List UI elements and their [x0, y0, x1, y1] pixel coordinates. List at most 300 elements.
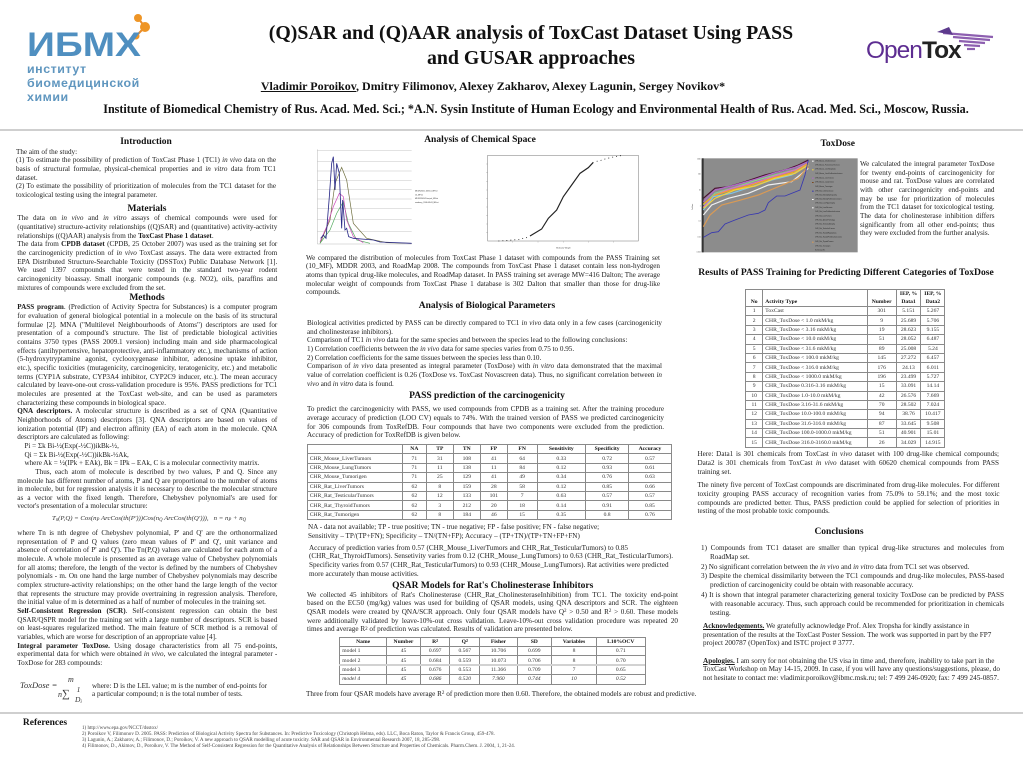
text: Chebyshev explanation: Integral parameter ToxDose. Using dosage characteristics from all 75 end-points,	[17, 642, 277, 650]
table: PASS training results: CHR_ToxDose 316.0-3160.0 mkM/kg	[765, 440, 852, 446]
table: carcinogenicity prediction accuracy: 64	[519, 456, 525, 462]
text: Chebyshev explanation: on least-squares regularized method. The main feature of SCR method is a removal of	[17, 624, 277, 632]
text: accuracy notes: more accurately than mouse activities.	[309, 570, 419, 578]
text: Chebyshev explanation: molecule. A whole molecule is presented as an average value of Chebyshev polynomials	[17, 555, 277, 563]
table: carcinogenicity prediction accuracy: CHR_Mouse_LungTumors	[310, 465, 371, 471]
table: PASS training results: CHR_ToxDose 31.6-316.0 mkM/kg	[765, 421, 846, 427]
title: (Q)SAR and (Q)AAR analysis of ToxCast Dataset Using PASS	[269, 22, 793, 44]
text: chemical space description: compounds.	[306, 288, 341, 296]
text: methods	[17, 303, 278, 510]
table: PASS training results: CHR_ToxDose 0.316-3.16 mkM/kg	[765, 383, 846, 389]
table: PASS training results: 26	[879, 440, 884, 446]
table: carcinogenicity prediction accuracy: CHR_Rat_LiverTumors	[310, 484, 364, 490]
table: carcinogenicity prediction accuracy: 49	[519, 474, 525, 480]
title: and GUSAR approaches	[427, 46, 635, 68]
chart: molecular distribution line chart: 10_MF.txt	[415, 193, 423, 196]
text: acknowledgements: presentation of the results at the ToxCast Poster Session. The work was supported in part by the FP7	[703, 631, 991, 639]
chart: ToxDose curves: CHR_Mouse_LiverProliferativeLesions	[815, 172, 843, 175]
table: carcinogenicity prediction accuracy: Accuracy	[639, 446, 661, 452]
text: Chebyshev explanation: experimental data for which were obtained in vivo, we calculated the integral parameter -	[17, 650, 277, 658]
table: PASS training results: 11	[751, 402, 757, 408]
text: Chebyshev explanation: for all atoms; therefore, the length of the vector is defined by the numbers of Chebyshev	[17, 564, 277, 572]
table: carcinogenicity prediction accuracy: CHR_Mouse_Tumorigen	[310, 474, 367, 480]
chart: ToxDose curves: CHR_Rat_TesticularTumors	[815, 227, 835, 230]
table: PASS training results: IEP, %	[924, 291, 941, 297]
text: apologies	[703, 657, 1000, 682]
text: conclusions list	[701, 544, 1004, 617]
text: methods: Qi = Σk Bi-½(Exp(-½C))ikBk-½Ak,	[24, 451, 129, 459]
table: PASS training results: Activity Type	[765, 299, 797, 305]
table: PASS training results: 19	[879, 327, 884, 333]
table: PASS training results: 301	[877, 308, 886, 314]
table: PASS training results: 87	[879, 421, 884, 427]
text: references: 3) Lagunin, A.; Zakharov, A.; Filimonov, D.; Poroikov, V. A new approach to QSAR modelling of acute toxicity. SAR and QSAR in Environmental Research 2007, 18, 285-298.	[82, 737, 440, 743]
table: PASS training results: 9.508	[927, 421, 939, 427]
table: carcinogenicity prediction accuracy: 101	[490, 493, 498, 499]
formula: Chebyshev: Tn(P,Q) = Cos(nP ArcCos(th(P')))Cos(nQ ArcCos(th(Q'))), n = nP + nQ	[52, 515, 246, 523]
chart: ToxDose curves: 0.01	[698, 236, 701, 238]
text: introduction: The aim of the study:	[16, 148, 77, 156]
table: PASS training results: Number	[872, 299, 892, 305]
table: QSAR model validation: model 4	[342, 676, 360, 682]
text: conclusions list: 1) Compounds from TC1 dataset are smaller than typical drug-like structures and molecules from	[701, 544, 1004, 552]
table: carcinogenicity prediction accuracy: 46	[491, 512, 497, 518]
chart: molecular distribution line chart	[317, 149, 439, 244]
icon: orange molecule dots	[134, 14, 150, 40]
table: carcinogenicity prediction accuracy: 108	[463, 456, 471, 462]
table: QSAR model validation: 0.52	[616, 676, 626, 682]
table: PASS training results: 5.267	[927, 308, 939, 314]
text: methods: PASS program. (Prediction of Activity Spectra for Substances) is a computer program	[17, 303, 277, 311]
text: ToxDose description: mouse and rat. ToxDose values are correlated	[860, 177, 994, 185]
chart: ToxDose curves: Summary LEL	[815, 250, 825, 252]
table: PASS training results: Data2	[926, 299, 940, 305]
table: carcinogenicity prediction accuracy: 0.8	[604, 512, 611, 518]
chart: ToxDose curves: CHR_Rat_LiverTumors	[815, 214, 832, 217]
text: chemical space description: atoms than typical drug-like molecules, and RoadMap dataset. In PASS training set average MW=416 Dalton; The average	[306, 271, 660, 279]
table: carcinogenicity prediction accuracy: CHR_Mouse_LiverTumors	[310, 456, 371, 462]
text: biological parameters: Biological activities predicted by PASS can be directly compared to TC1 in vivo data only in a few cases (carcinogenicity	[307, 319, 662, 327]
text: PASS prediction: for 306 compounds from ToxRefDB. Four compounds that have two components were excluded from the prediction.	[307, 423, 664, 431]
heading: ToxDose: ToxDose	[820, 139, 855, 149]
table: carcinogenicity prediction accuracy: 0.14	[556, 503, 566, 509]
chart: ToxDose curves: CHR_Rat_Cholinesterase	[815, 189, 833, 192]
heading: PASS prediction of the carcinogenicity: PASS prediction of the carcinogenicity	[409, 391, 565, 401]
table: carcinogenicity prediction accuracy: NA	[410, 446, 418, 452]
chart: ToxDose curves: CHR_Mouse_Tumorigen	[815, 186, 833, 188]
text: references: 1) http://www.epa.gov/NCCT/dsstox/	[82, 725, 158, 731]
table: carcinogenicity prediction accuracy: 0.57	[645, 456, 655, 462]
table: QSAR model validation: 45	[401, 667, 406, 673]
text: QSAR models: QSAR models were created by QNA/SCR approach. Only four QSAR models have Q2 > 0.50 and R2 > 0.60. These models	[307, 608, 678, 616]
table: carcinogenicity prediction accuracy: 62	[412, 512, 417, 518]
table: carcinogenicity prediction accuracy: 0.34	[556, 474, 566, 480]
text: QSAR models	[307, 591, 678, 633]
table: carcinogenicity prediction accuracy: 18	[519, 503, 525, 509]
text: QSAR models: were additionally validated by leave-10%-out cross validation. Leave-10%-out cross validation procedure was repeated 20	[307, 617, 678, 625]
chart: ToxDose curves: CHR_Rat_ThyroidProliferativeLesions	[815, 236, 842, 239]
bottom divider	[0, 712, 1023, 714]
table: carcinogenicity prediction accuracy: FP	[490, 446, 497, 452]
authors: Vladimir Poroikov, Dmitry Filimonov, Alexey Zakharov, Alexey Lagunin, Sergey Novikov*	[261, 79, 725, 93]
table: QSAR model validation: 0.709	[528, 667, 541, 673]
text: introduction: basis of structural formulae, physical-chemical properties and in vitro data from TC1	[16, 165, 276, 173]
table: PASS training results: ToxCast	[765, 308, 784, 314]
text: PASS prediction: average accuracy of prediction (LOO CV) equals to 74%. With the trained version of PASS we predicted carcinogenicity	[307, 414, 664, 422]
table: carcinogenicity prediction accuracy: 129	[463, 474, 471, 480]
table: PASS training results: 38.76	[902, 411, 915, 417]
text: methods: ionization potential (IP) and electron affinity (EA) of each atom in the molecule. QNA	[17, 425, 277, 433]
table: carcinogenicity prediction accuracy	[307, 444, 672, 520]
table: PASS training results: 26.576	[901, 393, 916, 399]
text: discrimination summary: testing of the most probable toxic compounds.	[698, 507, 830, 515]
text: biological parameters	[307, 319, 662, 388]
text: methods: descriptors are calculated as following:	[17, 433, 129, 441]
table: carcinogenicity prediction accuracy: 12	[437, 493, 443, 499]
text: Chebyshev explanation: polynomials - m. On one hand the large number of Chebyshev polynomials may describe	[17, 572, 277, 580]
chart: ToxDose curves: CHR_Rat_KidneyNephropathy	[815, 193, 837, 196]
text: apologies: ToxCast Workshop on May 14-15, 2009. In case, if you will have any questions/suggestions, please, do	[703, 665, 1000, 673]
text: ToxDose description: may be use for prioritization of molecules	[860, 195, 994, 203]
chart: ToxDose curves: 0.001	[697, 252, 701, 254]
chart: ToxDose curves: CHR_Mouse_LiverTumors	[815, 177, 834, 179]
heading: Conclusions: Conclusions	[814, 527, 864, 537]
table: PASS training results: 89	[879, 346, 884, 352]
table: carcinogenicity prediction accuracy: 71	[412, 465, 417, 471]
table: PASS training results: 51	[879, 430, 884, 436]
text: materials: mixtures of compounds were excluded from the set.	[17, 284, 166, 292]
fraction one over D: 1	[77, 685, 80, 694]
chart: ToxDose curves: CHR_Rat_SpleenPathology	[815, 218, 835, 221]
text: methods: terms (CYP1A substrate, CYP3A4 inhibitor, CYP2C9 inducer, etc.). The mean accuracy	[17, 373, 277, 381]
table: PASS training results: 1	[753, 308, 756, 314]
table: carcinogenicity prediction accuracy: 212	[463, 503, 471, 509]
text: methods: vector's presentation of a molecular structure:	[17, 502, 148, 510]
table: PASS training results: 51	[879, 336, 884, 342]
text: acknowledgements	[703, 622, 992, 647]
chart: molecular distribution line chart: roadmap_2008-09-09_MF.txt	[415, 201, 439, 204]
logo caption: биомедицинской	[27, 76, 140, 90]
text: biological parameters: vivo and in vitro data is found.	[307, 380, 394, 388]
table: PASS training results: 145	[877, 355, 886, 361]
table: carcinogenicity prediction accuracy: 3	[438, 503, 441, 509]
chart: ToxDose curves: CHR_Rat_ThyroidHyperplasia	[815, 231, 837, 234]
logo wordmark: ИБМХ	[27, 26, 141, 64]
table: carcinogenicity prediction accuracy: TP	[436, 446, 443, 452]
text: ToxDose description: for twenty end-points of carcinogenicity for	[860, 169, 994, 177]
heading: Results of PASS Training: Results of PASS Training for Predicting Different Categories of ToxDose	[698, 267, 994, 278]
table: PASS training results: 24.13	[902, 365, 915, 371]
text: methods: effects (antihypertensive, hepatoprotective, anti-inflammatory etc.), mechanisms of action	[17, 347, 277, 355]
table: PASS training results: 4	[753, 336, 756, 342]
text: Chebyshev explanation: ToxDose for 283 compounds:	[17, 659, 102, 667]
table: PASS training results: 14.14	[927, 383, 939, 389]
text: discrimination summary: compounds are predicted better. Thus, PASS prediction could be applied for selection of priorities in	[698, 499, 1000, 507]
logo caption: институт	[27, 62, 87, 76]
text: biological parameters: 1) Correlation coefficients between the in vivo data for same species varies from 0.75 to 0.95.	[307, 345, 574, 353]
text: ToxDose description: with other carcinogenicity end-points and	[860, 186, 994, 194]
text: PASS prediction: To predict the carcinogenicity with PASS, we used compounds from CPDB as a training set. After the training procedure	[307, 405, 664, 413]
text: introduction: dataset.	[16, 174, 38, 182]
table: PASS training results: 9	[753, 383, 756, 389]
text: references: 4) Filimonov, D., Akimov, D., Poroikov, V. The Method of Self-Consistent Regression for the Quantitative Analysis of Relationships Between Structure and Properties of Chemicals. Pharm.Chem. J. 2004, 1, 21-24.	[82, 743, 515, 749]
text: ToxDose description: The data for cholinesterase inhibition differs	[860, 212, 994, 220]
text: formula legend: a particular compound; n is the total number of tests.	[92, 690, 243, 698]
table: QSAR model validation: 0.553	[458, 667, 471, 673]
table: PASS training results: 7	[753, 365, 756, 371]
table: PASS training results: 6.457	[927, 355, 939, 361]
text: QSAR models: We collected 45 inhibitors of Rat's Cholinesterase (CHR_Rat_CholinesteraseInhibition) from TC1. The toxicity end-point	[307, 591, 678, 599]
table: QSAR model validation: 7.960	[492, 676, 505, 682]
text: conclusions list: prediction of carcinogenicity could be obtain with reasonable accuracy.	[710, 581, 914, 589]
table: PASS training results: 70	[879, 402, 884, 408]
table: PASS training results: 25.008	[901, 346, 916, 352]
table: PASS training results: CHR_ToxDose < 3.16 mkM/kg	[765, 327, 836, 333]
table: QSAR model validation: 0.697	[429, 648, 441, 654]
table: QSAR model validation: 45	[401, 676, 406, 682]
text: table abbreviations: Sensitivity – TP/(TP+FN); Specificity – TN/(TN+FP); Accuracy – (TP+TN)/(TP+TN+FP+FN)	[308, 532, 580, 540]
text: materials: The data on in vivo and in vitro assays of chemical compounds were used for	[17, 214, 277, 222]
text: chemical space description	[306, 254, 660, 296]
table: PASS training results: 33.091	[901, 383, 916, 389]
text: introduction: toxicological testing using the integral parameter.	[16, 191, 157, 199]
text: materials: relationships ((Q)AAR) analysis from the ToxCast Phase 1 dataset.	[17, 232, 214, 240]
text: biological parameters: 2) Correlation coefficients for the same tissues between the species less than 0.10.	[307, 354, 541, 362]
text: materials: EPA Distributed Structure-Searchable Toxicity (DSSTox) Public Database Network [1].	[17, 258, 277, 266]
text: accuracy notes	[309, 544, 673, 578]
table: carcinogenicity prediction accuracy: 8	[438, 512, 441, 518]
table: PASS training results: CHR_ToxDose 1.0-10.0 mkM/kg	[765, 393, 840, 399]
table: carcinogenicity prediction accuracy: 0.76	[602, 474, 612, 480]
text: ToxDose description: significantly from all other end-points; thus	[860, 221, 994, 229]
text: data definitions: Here: Data1 is 301 chemicals from ToxCast in vivo dataset with 100 drug-like chemical compounds;	[698, 450, 999, 458]
text: chemical space description: We compared the distribution of molecules from ToxCast Phase 1 dataset with compounds from the PASS Training set	[306, 254, 660, 262]
table: PASS training results: CHR_ToxDose < 10.0 mkM/kg	[765, 336, 836, 342]
table: PASS training results: CHR_ToxDose < 100.0 mkM/kg	[765, 355, 839, 361]
text: materials	[17, 214, 278, 292]
table: carcinogenicity prediction accuracy: 8	[438, 484, 441, 490]
table: PASS training results: 6.487	[927, 336, 939, 342]
table: QSAR model validation: 0.70	[616, 658, 626, 664]
table: PASS training results: 40.901	[901, 430, 916, 436]
table: PASS training results: 6.011	[927, 365, 939, 371]
table: carcinogenicity prediction accuracy: 62	[412, 493, 417, 499]
text: biological parameters: value of correlation coefficient is 0.26 (ToxDose vs. ToxCast Novascreen data). Thus, no significant correlation between in	[307, 371, 662, 379]
icon: striped fan	[937, 27, 994, 50]
fraction one over D: Di	[75, 695, 82, 705]
table: carcinogenicity prediction accuracy: 0.35	[556, 512, 566, 518]
text: QSAR models: based on the EC50 (mg/kg) values was used for building of QSAR models, using QNA descriptors and SCR. The eighteen	[307, 599, 678, 607]
table: carcinogenicity prediction accuracy: 0.93	[602, 465, 612, 471]
chart: cumulative molecular weight: Molecular Weight	[556, 247, 571, 250]
text: biological parameters: Comparison of TC1 in vivo data for the same species and between the species lead to the following conclusions:	[307, 336, 627, 344]
text: conclusions list: testing.	[710, 609, 731, 617]
text: acknowledgements: project 200787 (OpenTox) and ISTC project # 3777.	[703, 639, 854, 647]
text: data definitions	[698, 450, 999, 476]
table: QSAR model validation: 7	[573, 667, 575, 673]
table: PASS training results: 15	[751, 440, 757, 446]
table: PASS training results: 12	[751, 411, 757, 417]
table: PASS training results: CHR_ToxDose < 31.6 mkM/kg	[765, 346, 836, 352]
text: Chebyshev explanation: representation of P and Q values (zero mean values of P' and Q', unit variance and	[17, 538, 277, 546]
text: formula legend: where: D is the LEL value; m is the number of end-points for	[92, 682, 267, 690]
table: PASS training results: 42	[879, 393, 884, 399]
table: PASS training results: 196	[877, 374, 886, 380]
text: formula legend	[92, 682, 267, 698]
text: accuracy notes: Specificity varies from 0.57 (CHR_Rat_TesticularTumors) to 0.93 (CHR_Mouse_LungTumors). Rat activities were predicted	[309, 561, 669, 569]
text: QSAR models: times and average R2 of prediction was calculated. Results of validation are presented below.	[307, 625, 573, 633]
table: PASS training results: 7.669	[927, 393, 939, 399]
table: QSAR model validation: L10%OCV	[607, 639, 634, 645]
chart: ToxDose curves: CHR_Rat_KidneyProliferativeLesions	[815, 197, 842, 200]
table: carcinogenicity prediction accuracy: TN	[463, 446, 471, 452]
chart: ToxDose curves: CHR_Mouse_LiverNeoplastic	[815, 168, 836, 171]
table: PASS training results: 15.01	[927, 430, 939, 436]
text: apologies: not hesitate to contact me: vladimir.poroikov@ibmc.msk.ru; tel: 7 499 246-0920; fax: 7 499 245-0857.	[703, 674, 999, 682]
text: Chebyshev explanation: the initial value of m is determined as a half of number of molecules in the training set.	[17, 598, 266, 606]
text: Chebyshev explanation: Self-Consistent Regression (SCR). Self-consistent regression can obtain the best	[17, 607, 277, 615]
table: carcinogenicity prediction accuracy: 0.66	[645, 484, 655, 490]
text: apologies: Apologies. I am sorry for not obtaining the US visa in time and, therefore, inability to take part in the	[703, 657, 994, 665]
table: QSAR model validation: R2	[432, 639, 438, 645]
heading: Analysis of Chemical Space: Analysis of Chemical Space	[424, 135, 536, 145]
table: PASS training results: 33.645	[901, 421, 916, 427]
chart: ToxDose curves	[692, 158, 858, 254]
table: PASS training results: 28.052	[901, 336, 916, 342]
table: PASS training results: 10	[751, 393, 757, 399]
text: methods: where Ak = ½(IPk + EAk), Bk = IPk – EAk, C is a molecular connectivity matrix.	[24, 459, 259, 467]
formula: ToxDose	[20, 675, 82, 705]
table: carcinogenicity prediction accuracy: Specificity	[595, 446, 620, 452]
table: PASS training results: 28.623	[901, 327, 916, 333]
text: conclusions list: 4) It is shown that integral parameter characterizing general toxicity ToxDose can be predicted by PASS	[701, 591, 1004, 599]
chart: ToxDose curves: CHR_Mouse_Cholinesterase	[815, 160, 836, 163]
chart: ToxDose curves: 1	[700, 205, 701, 207]
text: materials: the carcinogenicity prediction of in vivo ToxCast assays. The data were extracted from	[17, 249, 277, 257]
table: PASS training results: IEP, %	[900, 291, 917, 297]
table: PASS training results: 13	[751, 421, 757, 427]
table: PASS training results: CHR_ToxDose < 1.0 mkM/kg	[765, 318, 833, 324]
heading: References: References	[23, 718, 67, 728]
text: methods: characterizing these compounds in biological space.	[17, 399, 166, 407]
text: data definitions: training set.	[698, 468, 731, 476]
text: introduction: (1) To estimate the possibility of prediction of ToxCast Phase 1 (TC1) in vivo data on the	[16, 156, 276, 164]
table: carcinogenicity prediction accuracy: 0.33	[556, 456, 566, 462]
table: QSAR model validation: 0.699	[528, 648, 541, 654]
table: QSAR model validation: Fisher	[491, 639, 506, 645]
chart: ToxDose curves: CHR_Rat_LiverHypertrophy	[815, 202, 835, 205]
chart: molecular distribution line chart: MDDR2003-Principal_MF.txt	[415, 197, 439, 200]
table: QSAR model validation: 45	[401, 658, 406, 664]
text: discrimination summary: toxicity grouping PASS accuracy of recognition varies from 75.0% to 59.1%; and the most toxic	[698, 490, 1000, 498]
text: Chebyshev explanation: variables, which are worse for description of an appropriate value [4].	[17, 633, 217, 641]
chart: ToxDose curves: ToxDose	[692, 204, 694, 210]
top divider	[0, 128, 1023, 130]
text: biological parameters: Comparison of in vivo data presented as integral parameter (ToxDose) with in vitro data demonstrated that the maximal	[307, 362, 662, 370]
text: references: 2) Poroikov V, Filimonov D. 2005. PASS: Prediction of Biological Activity Spectra for Substances. In: Predictive Toxicology (Christoph Helma, eds). LLC, Boca Raton, Taylor & Francis Group, 459-478.	[82, 731, 495, 737]
table: PASS training results: 23.499	[901, 374, 916, 380]
table: PASS training results: 28.502	[901, 402, 916, 408]
table: QSAR model validation: Number	[394, 639, 413, 645]
table: carcinogenicity prediction accuracy: CHR_Rat_Tumorigen	[310, 512, 359, 518]
chart: ToxDose curves: CHR_Rat_LiverNecrosis	[815, 206, 833, 209]
denominator: n∑	[58, 688, 70, 700]
text: conclusions list: 3) Despite the chemical dissimilarity between the TC1 compounds and drug-like molecules, PASS-based	[701, 572, 1004, 580]
table: carcinogenicity prediction accuracy: 7	[521, 493, 524, 499]
table: QSAR model validation: 0.567	[458, 648, 471, 654]
text: discrimination summary: The ninety five percent of ToxCast compounds are discriminated from drug-like molecules. For different	[698, 481, 1000, 489]
table: PASS training results: No	[751, 299, 758, 305]
table: QSAR model validation: Variables	[563, 639, 585, 645]
table: carcinogenicity prediction accuracy: 62	[412, 484, 417, 490]
table: QSAR model validation: 8	[573, 658, 575, 664]
table: carcinogenicity prediction accuracy: 31	[437, 456, 443, 462]
text: methods: Pi = Σk Bi-½(Exp(-½C))ikBk-½,	[24, 442, 119, 450]
text: materials: We used 1397 compounds that were tested in the standard two-year rodent	[17, 266, 277, 274]
text: methods: in molecule, but for regression analysis it is necessary to describe the molecular structure	[17, 485, 277, 493]
chart: ToxDose curves: 0.1	[698, 221, 701, 223]
table: PASS training results: 5.151	[902, 308, 915, 314]
table: carcinogenicity prediction accuracy: CHR_Rat_TesticularTumors	[310, 493, 374, 499]
text: accuracy notes: Accuracy of prediction varies from 0.57 (CHR_Mouse_LiverTumors and CHR_Rat_TesticularTumors) to 0.85	[309, 544, 628, 552]
chart: ToxDose curves: CHR_Rat_TesticularAtrophy	[815, 223, 835, 226]
text: accuracy notes: (CHR_Rat_ThyroidTumors). Sensetivity varies from 0.12 (CHR_Mouse_LungTumors) to 0.63 (CHR_Rat_TesticularTumors).	[309, 552, 673, 560]
table: QSAR model validation: 0.684	[429, 658, 441, 664]
table: PASS training results: CHR_ToxDose 10.0-100.0 mkM/kg	[765, 411, 846, 417]
numerator: m	[68, 675, 74, 684]
text: introduction: (2) To estimate the possibility of prioritization of molecules from the TC1 dataset for the	[16, 182, 276, 190]
table: PASS training results: CHR_ToxDose 3.16-31.6 mkM/kg	[765, 402, 843, 408]
table: QSAR model validation: 0.559	[458, 658, 471, 664]
fraction one over D	[74, 685, 82, 705]
chart: ToxDose curves: CHR_Rat_LiverProliferativeLesions	[815, 210, 840, 213]
header: logo IBMX	[27, 14, 150, 104]
text: PASS prediction: Accuracy of prediction for ToxRefDB is given below.	[307, 431, 461, 439]
table: carcinogenicity prediction accuracy: 25	[437, 474, 443, 480]
table: QSAR model validation: 0.65	[616, 667, 626, 673]
table: PASS training results: CHR_ToxDose < 316.0 mkM/kg	[765, 365, 839, 371]
table: PASS training results: Data1	[901, 299, 916, 305]
logo wordmark: OpenTox	[866, 37, 961, 64]
table: QSAR model validation: 0.520	[458, 676, 471, 682]
table: PASS training results: 34.029	[901, 440, 916, 446]
table: carcinogenicity prediction accuracy: CHR_Rat_ThyroidTumors	[310, 503, 370, 509]
table: QSAR model validation: 0.744	[528, 676, 541, 682]
chart: ToxDose curves: 100	[698, 174, 701, 176]
table: PASS training results: 9.155	[927, 327, 939, 333]
text: methods: molecules are presented at the ToxCast web-site, and can be used as parameters	[17, 390, 277, 398]
table: PASS training results: 7.024	[927, 402, 939, 408]
table: PASS training results: 5.706	[927, 318, 939, 324]
table: carcinogenicity prediction accuracy: 71	[412, 456, 417, 462]
text: QSAR conclusion: Three from four QSAR models have average R2 of prediction more then 0.60. Therefore, the obtained models are robust and predictive.	[306, 690, 696, 698]
table: carcinogenicity prediction accuracy: Sensitivity	[549, 446, 574, 452]
table: PASS training results: 176	[877, 365, 886, 371]
text: data definitions: Data2 is 301 chemicals from ToxCast in vivo dataset with 60620 chemical compounds from PASS	[698, 459, 999, 467]
text: conclusions list: 2) No significant correlation between the in vivo and in vitro data from TC1 set was observed.	[701, 563, 969, 571]
text: biological parameters: and cholinesterase inhibitors).	[307, 328, 393, 336]
text: discrimination summary	[698, 481, 1000, 515]
table: PASS training results: 6	[753, 355, 756, 361]
heading: Methods: Methods	[129, 293, 165, 303]
table: QSAR model validation: model 2	[342, 658, 360, 664]
table: carcinogenicity prediction accuracy: 11	[437, 465, 443, 471]
table: carcinogenicity prediction accuracy: FN	[518, 446, 526, 452]
table: carcinogenicity prediction accuracy: 138	[463, 465, 471, 471]
table: PASS training results: 5	[753, 346, 756, 352]
table: carcinogenicity prediction accuracy: 184	[463, 512, 471, 518]
table: QSAR model validation: 0.706	[528, 658, 541, 664]
